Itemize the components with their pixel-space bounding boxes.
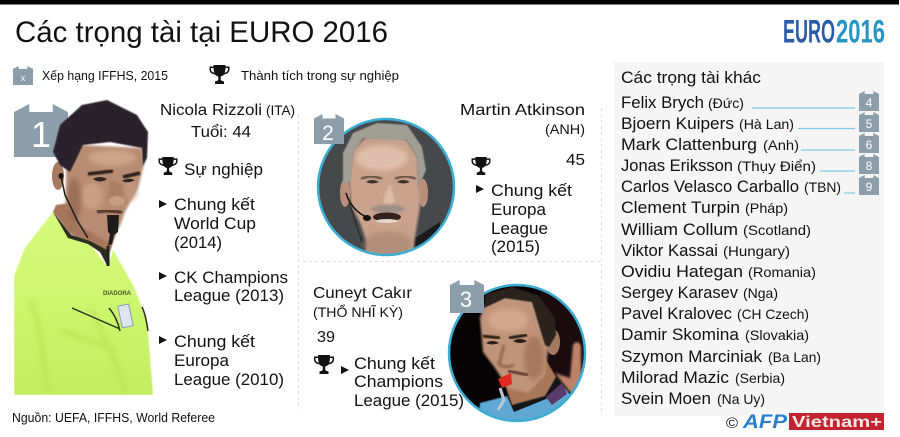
- microphone: [346, 193, 367, 217]
- eyebrows and eyes: [361, 176, 416, 179]
- age: 45: [566, 152, 585, 169]
- icon: trophy: [472, 157, 490, 175]
- row: Mark Clattenburg: [621, 133, 879, 154]
- collar: [507, 378, 563, 412]
- row: Carlos Velasco Carballo: [621, 175, 879, 196]
- row: Milorad Mazic: Milorad Mazic: [621, 368, 730, 387]
- achievement: Champions: [354, 372, 443, 391]
- row: Milorad Mazic: [621, 368, 785, 387]
- source: Nguồn: UEFA, IFFHS, World Referee: [12, 410, 215, 425]
- credit: AFP Vietnam+: [726, 412, 884, 433]
- neck: [53, 200, 118, 258]
- row: Svein Moen: Svein Moen: [621, 389, 711, 408]
- photo: Martin Atkinson: [316, 117, 456, 259]
- row: Clement Turpin: (Pháp): [745, 200, 788, 216]
- achievement: [341, 354, 464, 410]
- achievement 3: League (2010): [174, 370, 284, 389]
- nationality: (ITA): [266, 103, 295, 118]
- dark shirt: [413, 222, 440, 248]
- badge 3: [450, 280, 484, 313]
- achievement: Chung kết: [354, 354, 435, 373]
- achievement 1: Chung kết: [174, 195, 255, 214]
- row: Mark Clattenburg: Mark Clattenburg: [621, 135, 757, 154]
- eyebrows and eyes: [483, 335, 527, 338]
- row: Jonas Eriksson: [621, 154, 879, 175]
- row: Ovidiu Hategan: [621, 262, 816, 281]
- row: Clement Turpin: [621, 198, 788, 217]
- head: [480, 297, 548, 393]
- achievement 3: Chung kết: [174, 332, 255, 351]
- row: Szymon Marciniak: [621, 347, 821, 366]
- row: Jonas Eriksson: 8: [866, 159, 873, 173]
- credit: AFP Vietnam+: ©: [726, 415, 738, 432]
- logo: EURO 2016: EURO: [783, 14, 835, 50]
- dashed dividers: [298, 108, 602, 413]
- mouth: [508, 371, 528, 375]
- row: Carlos Velasco Carballo: 9: [866, 180, 873, 194]
- row: Felix Brych: Felix Brych: [621, 93, 704, 112]
- panel background: [614, 62, 884, 416]
- referee 3 details: [313, 285, 464, 410]
- achievement 2: League (2013): [174, 286, 284, 305]
- crest: [118, 304, 133, 328]
- nose and mouth shadow: [108, 181, 124, 198]
- legend text: achievements: Thành tích trong sự nghiệp: [241, 68, 399, 83]
- referee 1 details: [159, 102, 295, 389]
- moustache: [371, 205, 405, 213]
- achievement: Chung kết: [491, 181, 572, 200]
- row: Ovidiu Hategan: Ovidiu Hategan: [621, 262, 743, 281]
- badge 1: [14, 104, 68, 157]
- icon: rank badge: x: [21, 73, 26, 83]
- referee 2 details: [460, 102, 585, 256]
- row: Bjoern Kuipers: (Hà Lan): [739, 116, 794, 132]
- name: Nicola Rizzoli: [160, 102, 262, 119]
- nationality: (ANH): [545, 122, 585, 137]
- shirt placket: [106, 246, 110, 266]
- panel heading: Các trọng tài khác: [621, 68, 762, 87]
- row: Clement Turpin: Clement Turpin: [621, 198, 740, 217]
- achievement: (2015): [491, 237, 540, 256]
- hair: [343, 123, 426, 186]
- name: Martin Atkinson: [460, 102, 585, 119]
- hair: [53, 100, 148, 172]
- achievement: League (2015): [354, 391, 464, 410]
- row: Bjoern Kuipers: 5: [866, 117, 873, 131]
- collar: [53, 212, 108, 267]
- badge 2: 2: [322, 122, 334, 145]
- badge 3: 3: [460, 287, 472, 312]
- shirt: [14, 212, 153, 395]
- ears: [340, 179, 350, 207]
- neck: [505, 358, 556, 405]
- row: Damir Skomina: Damir Skomina: [621, 325, 740, 344]
- panel: other referees: [614, 62, 884, 416]
- achievement: Europa: [491, 200, 547, 219]
- row: William Collum: [621, 220, 811, 239]
- row: Jonas Eriksson: (Thụy Điển): [737, 158, 816, 174]
- row: Carlos Velasco Carballo: (TBN): [804, 179, 841, 195]
- nose: [383, 186, 395, 204]
- whistle: [107, 215, 119, 246]
- shirt: [478, 385, 570, 420]
- name: Cuneyt Cakır: [313, 285, 413, 302]
- row: Svein Moen: [621, 389, 765, 408]
- achievement: League: [491, 219, 548, 238]
- career heading: Sự nghiệp: [184, 161, 263, 179]
- row: Szymon Marciniak: Szymon Marciniak: [621, 347, 763, 366]
- top bar: [0, 0, 899, 4]
- eyebrows and eyes: [88, 171, 140, 177]
- row: Sergey Karasev: Sergey Karasev: [621, 283, 738, 302]
- row: Milorad Mazic: (Serbia): [735, 370, 785, 386]
- hand: [555, 342, 581, 395]
- row: Szymon Marciniak: (Ba Lan): [768, 349, 821, 365]
- legend: [13, 65, 399, 85]
- icon: rank badge: [13, 66, 33, 85]
- hair: [484, 287, 556, 347]
- row: Pavel Kralovec: Pavel Kralovec: [621, 304, 732, 323]
- brand mark: DIADORA: [103, 291, 132, 297]
- achievement 3: [159, 332, 284, 389]
- credit: AFP Vietnam+: Vietnam+: [792, 414, 882, 431]
- age: 39: [317, 329, 335, 346]
- legend text: ranking: Xếp hạng IFFHS, 2015: [42, 68, 168, 83]
- mouth: [373, 212, 401, 220]
- head and neck: [349, 136, 420, 258]
- row: William Collum: William Collum: [621, 220, 738, 239]
- achievement: [476, 181, 572, 256]
- row: Felix Brych: (Đức): [708, 95, 744, 111]
- whistle: [498, 373, 512, 388]
- credit: AFP Vietnam+: AFP: [742, 412, 787, 433]
- row: Viktor Kassai: [621, 241, 790, 260]
- row: Pavel Kralovec: [621, 304, 809, 323]
- pocket lines: [72, 307, 148, 331]
- row: Felix Brych: 4: [866, 96, 873, 110]
- earpiece wire: [61, 176, 88, 238]
- row: Ovidiu Hategan: (Romania): [748, 264, 816, 280]
- photo: Nicola Rizzoli: [14, 100, 153, 395]
- title: Các trọng tài tại EURO 2016: [15, 16, 388, 49]
- age: Tuổi: 44: [191, 123, 251, 141]
- row: Svein Moen: (Na Uy): [717, 391, 765, 407]
- badge 1: 1: [31, 114, 51, 155]
- achievement 1: World Cup: [174, 214, 256, 233]
- achievement 2: CK Champions: [174, 268, 288, 287]
- icon: trophy: [314, 355, 334, 374]
- achievement 1: [159, 195, 256, 252]
- icon: trophy legend: [210, 65, 230, 84]
- row: Viktor Kassai: (Hungary): [723, 243, 790, 259]
- row: Damir Skomina: [621, 325, 809, 344]
- icon: trophy: [159, 157, 177, 175]
- row: Bjoern Kuipers: Bjoern Kuipers: [621, 114, 734, 133]
- head: [66, 145, 144, 242]
- achievement 1: (2014): [174, 233, 222, 252]
- ear: [546, 329, 560, 355]
- row: Carlos Velasco Carballo: Carlos Velasco Carballo: [621, 177, 799, 196]
- row: Mark Clattenburg: (Anh): [763, 137, 799, 153]
- badge 2: [314, 114, 344, 145]
- nose: [499, 345, 514, 367]
- row: Damir Skomina: (Slovakia): [745, 327, 809, 343]
- row: Viktor Kassai: Viktor Kassai: [621, 241, 718, 260]
- row: Bjoern Kuipers: [621, 112, 879, 133]
- achievement 2: [159, 268, 288, 305]
- achievement 3: Europa: [174, 351, 230, 370]
- ear: [52, 162, 64, 190]
- row: Sergey Karasev: (Nga): [743, 285, 778, 301]
- photo: Cuneyt Cakir: [447, 283, 590, 423]
- row: Jonas Eriksson: Jonas Eriksson: [621, 156, 733, 175]
- row: Mark Clattenburg: 6: [866, 138, 873, 152]
- row: William Collum: (Scotland): [743, 222, 811, 238]
- nationality: (THỔ NHĨ KỲ): [313, 305, 403, 320]
- row: Felix Brych: [621, 91, 879, 112]
- row: Pavel Kralovec: (CH Czech): [737, 306, 809, 322]
